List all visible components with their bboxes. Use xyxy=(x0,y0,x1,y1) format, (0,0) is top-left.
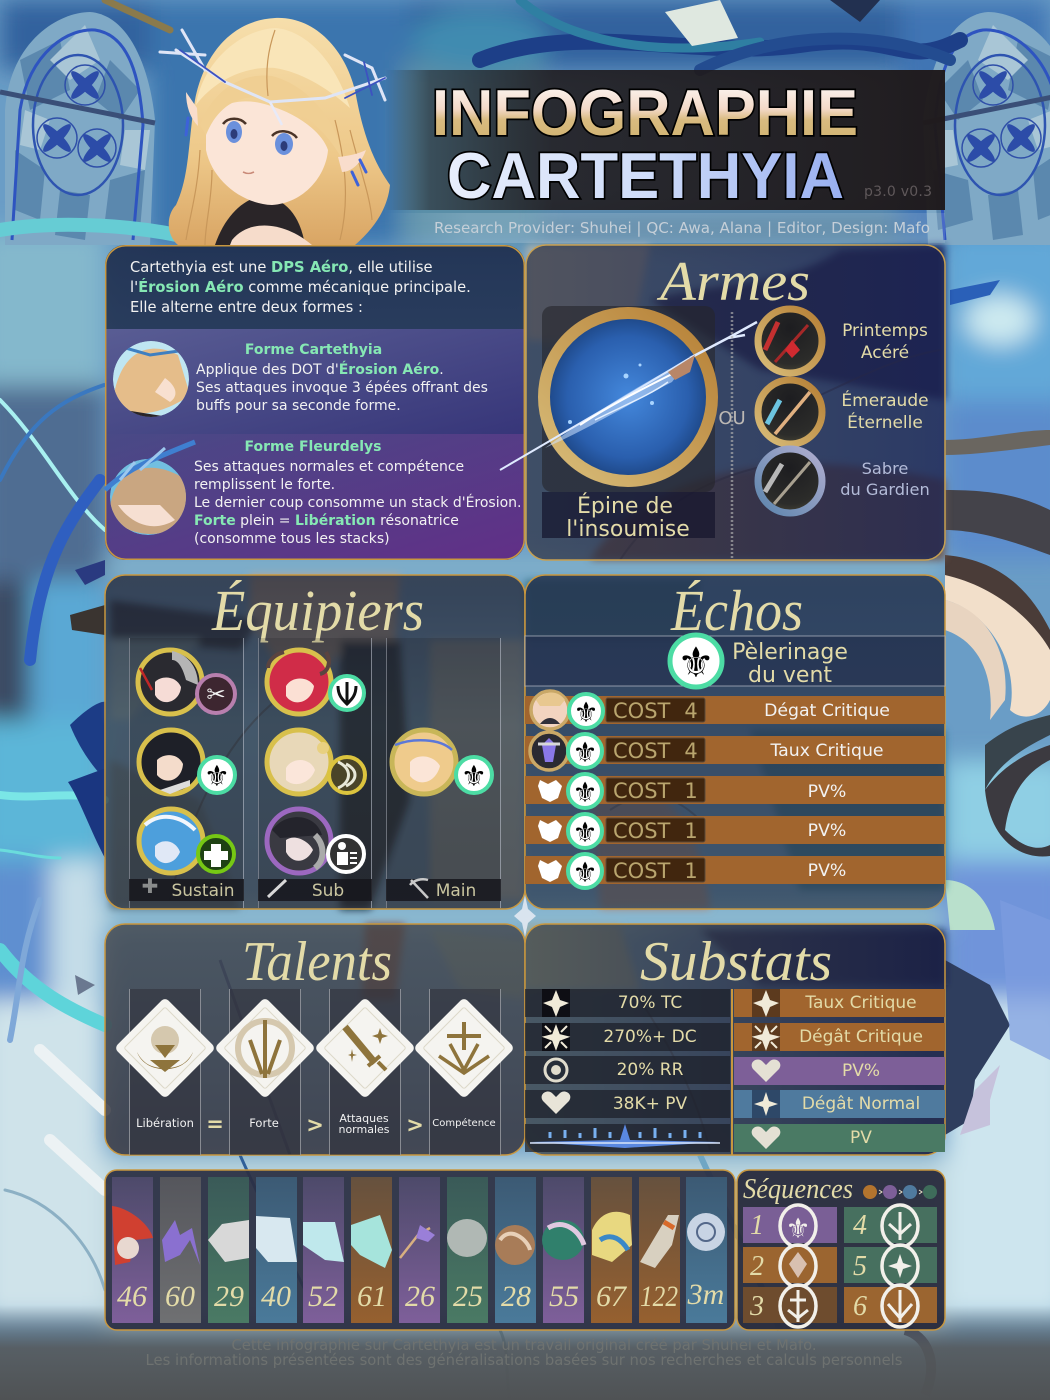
form 1 text: Ses attaques invoque 3 épées offrant des xyxy=(196,380,488,396)
panel: introduction xyxy=(105,245,525,560)
echo row 3: PV% xyxy=(808,782,846,802)
badge: wind wave xyxy=(329,757,365,793)
set band: Pèlerinage xyxy=(732,640,848,665)
avatar: black hair xyxy=(139,730,203,794)
echo row 4: COST xyxy=(613,819,671,843)
badge: healing xyxy=(198,836,234,872)
echo row 1: COST xyxy=(613,699,671,723)
material counts: 3m xyxy=(687,1278,724,1311)
left side streaks xyxy=(0,400,105,530)
role label: Sustain: Sustain xyxy=(171,881,235,901)
panel: teammates xyxy=(105,575,525,909)
title: CARTETHYIA xyxy=(447,139,844,212)
echo row 2: ⚜ xyxy=(572,736,598,769)
material counts: 122 xyxy=(640,1280,678,1313)
right substat priority: Dégât Normal xyxy=(802,1094,920,1114)
badge: support xyxy=(328,836,364,872)
echo row 2: Taux Critique xyxy=(769,741,884,761)
panel: sequences xyxy=(737,1170,945,1330)
echo row 1 xyxy=(525,691,945,729)
sequence 2: 2 xyxy=(750,1251,764,1282)
heading: Substats: Substats xyxy=(640,931,832,993)
echo row 1: ⚜ xyxy=(573,696,599,729)
badge: aero xyxy=(456,757,492,793)
echo row 1: 4 xyxy=(684,699,698,723)
sequence 1: 1 xyxy=(750,1210,764,1241)
sequence 6 xyxy=(844,1285,937,1327)
echo row 3: COST xyxy=(613,779,671,803)
sparkle ornament xyxy=(514,895,536,937)
main weapon name: Épine de xyxy=(577,493,673,519)
echo row 5: ⚜ xyxy=(572,856,598,889)
left substat targets xyxy=(525,989,730,1152)
talent labels xyxy=(136,1112,496,1136)
talent labels: Libération xyxy=(136,1116,194,1130)
intro text: Cartethyia est une DPS Aéro, elle utilise xyxy=(130,259,433,276)
weapon: Émeraude Éternelle xyxy=(758,380,929,444)
role columns xyxy=(129,638,500,908)
weapon: Sabre du Gardien: Sabre xyxy=(862,459,908,478)
intro text: Elle alterne entre deux formes : xyxy=(130,299,363,316)
talent priority operators xyxy=(206,1112,424,1137)
right side hair and fabric xyxy=(945,430,1050,455)
sequence 1: ⚜ xyxy=(785,1212,811,1245)
echo row 5 xyxy=(525,854,945,889)
echo row 4: PV% xyxy=(808,821,846,841)
role label: Sub: Sub xyxy=(312,881,344,901)
material icons xyxy=(112,1206,725,1268)
form 2 heading: Forme Fleurdelys xyxy=(245,439,381,455)
header band xyxy=(385,70,945,243)
right substat priority: Dégât Critique xyxy=(799,1027,923,1047)
badge: aero: ⚜ xyxy=(461,759,487,793)
version label: p3.0 v0.3 xyxy=(864,184,932,200)
arched windows xyxy=(0,12,155,245)
avatar: blue hair xyxy=(139,809,203,873)
form 1 text: buffs pour sa seconde forme. xyxy=(196,398,401,414)
decorative wave emblem xyxy=(530,1124,720,1148)
sequence 6: 6 xyxy=(853,1291,867,1322)
role label: Main: Main xyxy=(436,881,476,901)
sequence 4 xyxy=(844,1205,937,1247)
title xyxy=(432,76,858,212)
form 2 text: Ses attaques normales et compétence xyxy=(194,459,464,475)
material counts: 61 xyxy=(357,1280,387,1313)
sequence 3 xyxy=(743,1285,837,1327)
heading: Talents: Talents xyxy=(242,931,392,993)
material counts: 60 xyxy=(165,1280,195,1313)
form section backgrounds xyxy=(105,329,525,560)
title: INFOGRAPHIE xyxy=(432,76,858,149)
form 2 text: Forte plein = Libération résonatrice xyxy=(194,513,459,529)
sequence 5: 5 xyxy=(853,1251,867,1282)
weapon: Sabre du Gardien xyxy=(758,449,930,513)
weapon: Sabre du Gardien: du Gardien xyxy=(840,480,930,499)
echo row 5: PV% xyxy=(808,861,846,881)
talent labels: Compétence xyxy=(432,1117,496,1129)
material counts: 46 xyxy=(117,1280,147,1313)
weapon: Émeraude Éternelle: Émeraude xyxy=(841,389,929,411)
echo row 3: 1 xyxy=(684,779,698,803)
material counts: 26 xyxy=(405,1280,435,1313)
portrait of Cartethyia xyxy=(160,18,390,245)
material bars xyxy=(112,1177,727,1323)
echo row 5: 1 xyxy=(684,859,698,883)
left substat targets: 270%+ DC xyxy=(603,1027,697,1047)
role label: Sustain: ✚ xyxy=(142,874,158,898)
avatar: Cartethyia xyxy=(392,730,456,794)
avatar: Forme Fleurdelys xyxy=(105,442,195,535)
avatar: Forme Cartethyia xyxy=(113,341,190,420)
talent icon: Compétence xyxy=(413,997,515,1099)
weapon: Printemps Acéré: Printemps xyxy=(842,321,928,341)
weapon: Printemps Acéré xyxy=(758,309,928,373)
panel: echoes xyxy=(525,575,945,909)
sequence 3: 3 xyxy=(749,1291,764,1322)
heading: Séquences: Séquences xyxy=(743,1174,853,1205)
avatar: cream hair xyxy=(267,730,331,794)
left substat targets: 38K+ PV xyxy=(613,1094,688,1114)
echo row 2: COST xyxy=(613,739,671,763)
role label: Sub xyxy=(258,879,372,901)
heading: Équipiers: Équipiers xyxy=(211,578,424,643)
echo row 4: ⚜ xyxy=(572,816,598,849)
rarity progression dots xyxy=(863,1185,937,1199)
badge: havoc xyxy=(330,676,364,710)
form 1 heading: Forme Cartethyia xyxy=(245,342,382,358)
echo row 2: 4 xyxy=(684,739,698,763)
form 1 text: Applique des DOT d'Érosion Aéro. xyxy=(196,362,444,378)
form 2 text: (consomme tous les stacks) xyxy=(194,531,390,547)
echo row 2 xyxy=(525,732,945,770)
material counts: 28 xyxy=(501,1280,531,1313)
badge: aero: ⚜ xyxy=(204,759,230,793)
form 2 text: remplissent le forte. xyxy=(194,477,335,493)
talent priority operators: = xyxy=(206,1112,224,1136)
set band xyxy=(525,635,945,688)
set band: ⚜ xyxy=(677,638,715,687)
right substat priority: Taux Critique xyxy=(804,993,917,1013)
panel: talents xyxy=(105,924,525,1155)
sequence 1 xyxy=(743,1205,837,1247)
material counts: 52 xyxy=(308,1280,338,1313)
panel: ascension materials xyxy=(105,1170,735,1330)
talent priority operators: > xyxy=(306,1113,324,1137)
badge: scissors: ✂ xyxy=(206,682,226,708)
divider xyxy=(731,312,733,558)
weapon: Émeraude Éternelle: Éternelle xyxy=(847,411,923,433)
vertical divider xyxy=(731,989,733,1155)
panel: substats xyxy=(525,924,945,1155)
material counts: 40 xyxy=(261,1280,291,1313)
form 2 text: Le dernier coup consomme un stack d'Érosion. xyxy=(194,494,522,511)
material counts: 67 xyxy=(596,1280,628,1313)
set band: du vent xyxy=(748,663,832,688)
right substat priority: PV xyxy=(850,1128,872,1148)
heading: Échos: Échos xyxy=(670,578,803,643)
footer note: Les informations présentées sont des généralisations basées sur nos recherches et calculs personnels xyxy=(146,1351,903,1369)
material counts: 25 xyxy=(453,1280,483,1313)
avatar: red hair xyxy=(267,650,331,714)
footer note xyxy=(146,1336,903,1369)
main weapon name: l'insoumise xyxy=(566,517,690,542)
right substat priority: PV% xyxy=(842,1061,880,1081)
or label: OU xyxy=(718,408,746,429)
role label: Main xyxy=(386,879,501,901)
echo row 4: 1 xyxy=(684,819,698,843)
material counts: 55 xyxy=(549,1280,579,1313)
main weapon icon xyxy=(500,313,757,481)
echo row 3 xyxy=(525,774,945,809)
role label: Sustain xyxy=(129,874,244,901)
talent priority operators: > xyxy=(406,1113,424,1137)
echo row 4 xyxy=(525,814,945,849)
talent columns xyxy=(130,989,500,1155)
left substat targets: 20% RR xyxy=(617,1060,684,1080)
talent labels: Attaques xyxy=(339,1112,389,1125)
material counts: 29 xyxy=(214,1280,244,1313)
talent labels: Forte xyxy=(249,1116,279,1130)
panel: weapons xyxy=(500,245,945,560)
echo row 3: ⚜ xyxy=(572,776,598,809)
talent labels: normales xyxy=(338,1123,390,1136)
right substat priority xyxy=(734,989,945,1152)
sequence 2 xyxy=(743,1245,837,1287)
intro text: l'Érosion Aéro comme mécanique principale. xyxy=(130,279,471,296)
avatar: grey hair with cap xyxy=(267,809,331,873)
weapon: Printemps Acéré: Acéré xyxy=(861,343,909,363)
talent icon: Forte xyxy=(214,997,316,1099)
credits: Research Provider: Shuhei | QC: Awa, Alana | Editor, Design: Mafo xyxy=(434,219,930,237)
heading: Armes: Armes xyxy=(656,251,810,313)
talent icon: Attaques normales xyxy=(314,997,416,1099)
sequence 4: 4 xyxy=(853,1210,867,1241)
main weapon backdrop xyxy=(542,306,715,492)
left substat targets: 70% TC xyxy=(618,993,682,1013)
badge: scissors xyxy=(197,675,235,713)
badge: aero xyxy=(199,757,235,793)
talent icon: Libération xyxy=(114,997,216,1099)
illustration under the panels xyxy=(110,245,945,1000)
sequence 5 xyxy=(844,1245,937,1287)
material counts xyxy=(117,1278,724,1313)
avatar: black and grey hair xyxy=(138,650,202,714)
footer note: Cette infographie sur Cartethyia est un travail original créé par Shuhei et Mafo. xyxy=(232,1336,816,1354)
echo row 1: Dégat Critique xyxy=(764,701,890,721)
echo row 5: COST xyxy=(613,859,671,883)
